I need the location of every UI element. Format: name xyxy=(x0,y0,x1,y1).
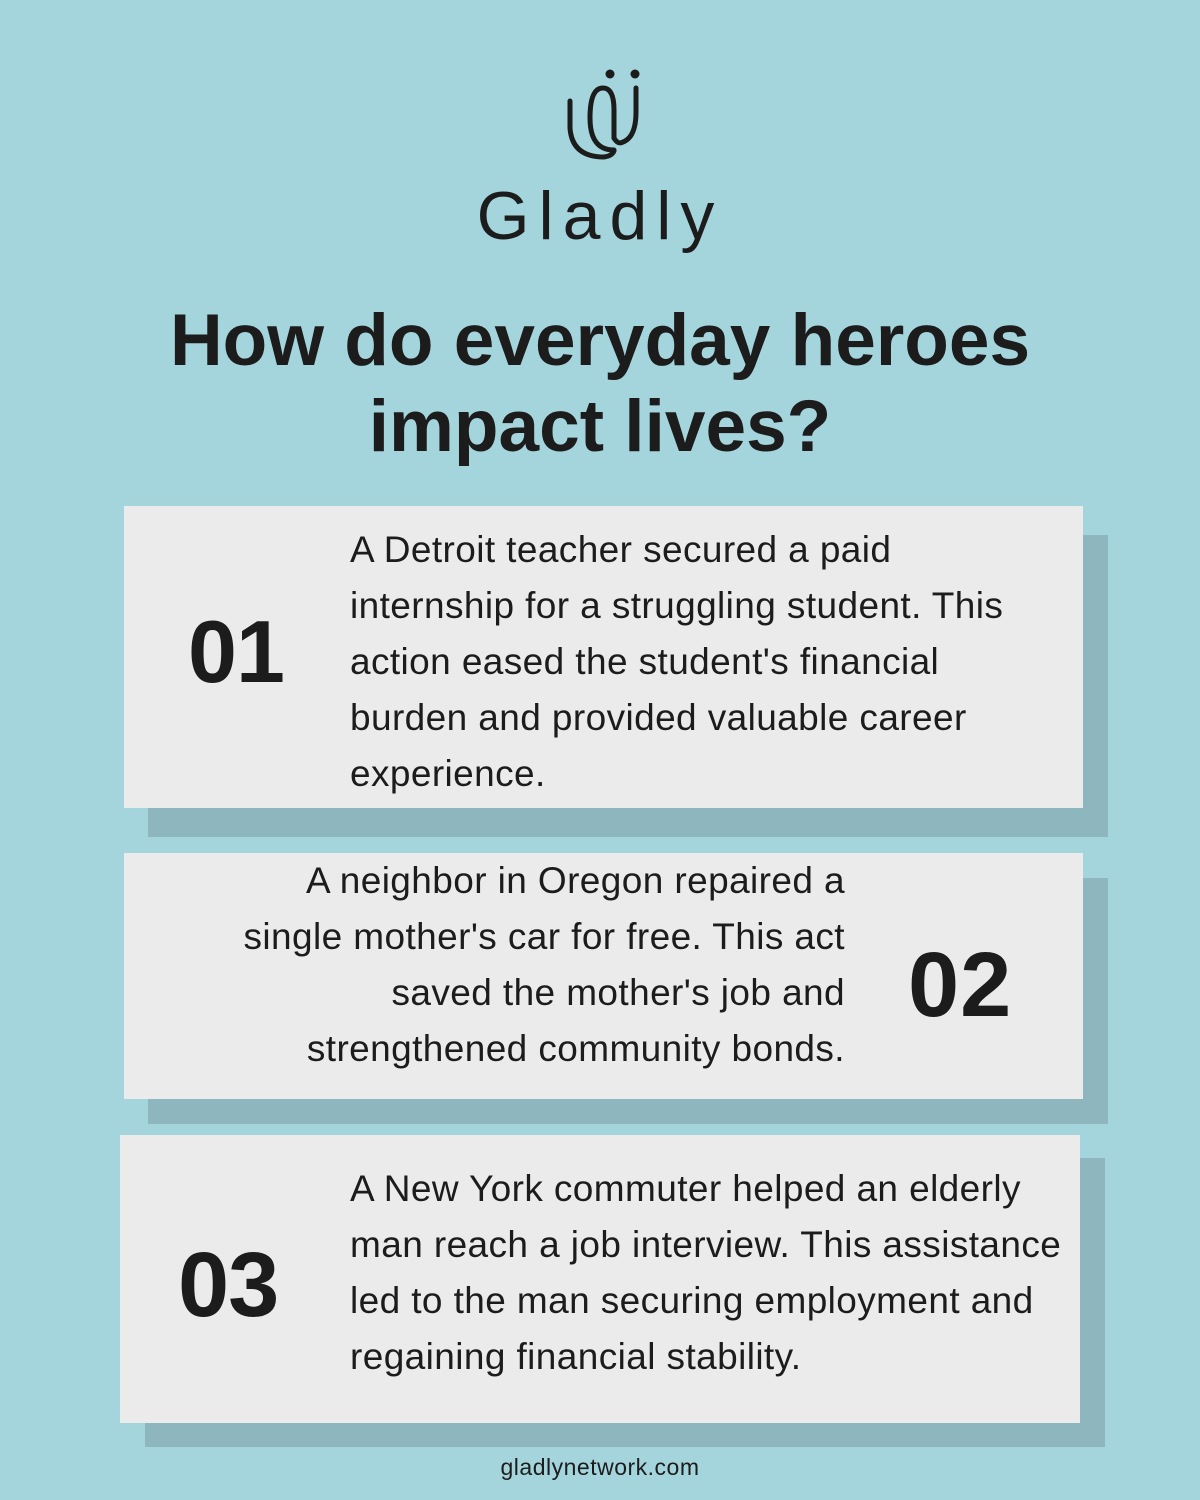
panel 2 xyxy=(124,853,1108,1124)
text 1: action eased the student's financial xyxy=(350,641,939,682)
text 1: A Detroit teacher secured a paid xyxy=(350,529,891,570)
brand name: Gladly xyxy=(477,178,723,254)
number 03: 03 xyxy=(178,1234,278,1336)
logo icon xyxy=(568,70,640,160)
text 1: internship for a struggling student. This xyxy=(350,585,1003,626)
text 3: man reach a job interview. This assistance xyxy=(350,1224,1061,1265)
panel 1 xyxy=(124,506,1108,837)
text 2: strengthened community bonds. xyxy=(307,1028,845,1069)
footer url: gladlynetwork.com xyxy=(501,1454,699,1480)
panel 3 xyxy=(120,1135,1105,1447)
title: How do everyday heroes xyxy=(170,300,1030,381)
text 1 xyxy=(350,529,1003,794)
text 2: single mother's car for free. This act xyxy=(244,916,845,957)
text 2: A neighbor in Oregon repaired a xyxy=(306,860,845,901)
text 1: experience. xyxy=(350,753,546,794)
number 01: 01 xyxy=(188,602,284,701)
text 2 xyxy=(244,860,845,1069)
number 02: 02 xyxy=(908,934,1012,1036)
text 3: A New York commuter helped an elderly xyxy=(350,1168,1021,1209)
title: impact lives? xyxy=(369,386,831,467)
text 3: led to the man securing employment and xyxy=(350,1280,1034,1321)
text 3: regaining financial stability. xyxy=(350,1336,801,1377)
text 2: saved the mother's job and xyxy=(391,972,845,1013)
title xyxy=(170,300,1030,467)
text 1: burden and provided valuable career xyxy=(350,697,967,738)
text 3 xyxy=(350,1168,1061,1377)
